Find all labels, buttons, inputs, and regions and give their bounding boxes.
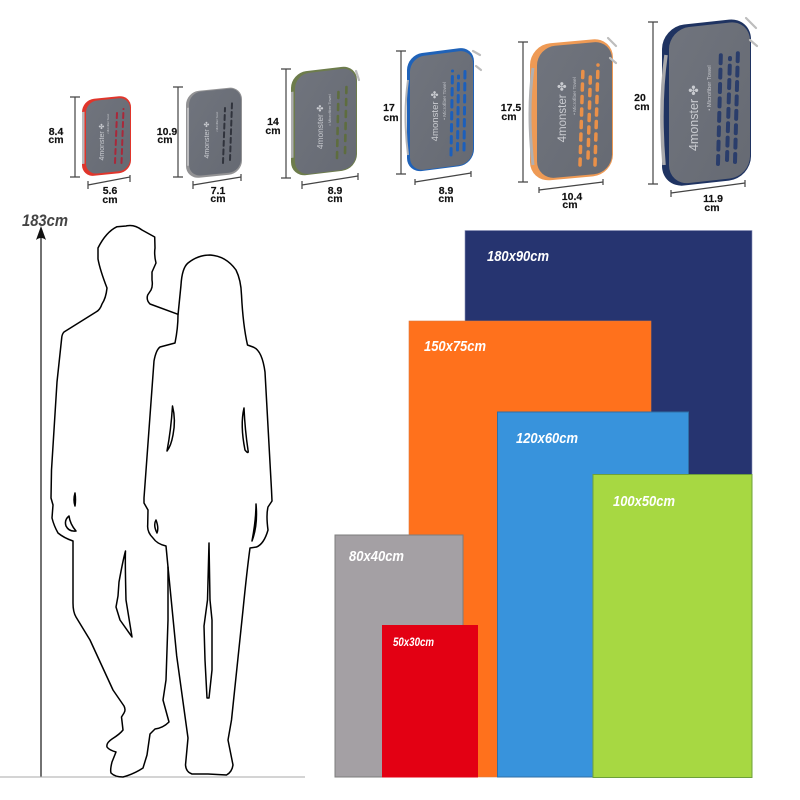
case body: grey <box>186 86 242 179</box>
case body: navy <box>662 17 751 188</box>
height label: 14 <box>267 116 279 128</box>
height label: cm <box>383 112 399 124</box>
case branding: 4monster ✤ <box>98 123 106 160</box>
case branding <box>557 77 578 142</box>
height dimension <box>281 69 291 178</box>
label: 80x40cm <box>349 549 404 565</box>
height label: cm <box>634 101 650 113</box>
width label: 11.9 <box>703 193 723 205</box>
case branding: • Microfiber Towel <box>572 77 578 115</box>
height dimension <box>70 97 80 177</box>
man inner gaps <box>65 493 132 637</box>
width label: cm <box>102 194 118 206</box>
case branding <box>430 82 448 141</box>
height dimension <box>648 22 658 184</box>
width label: 7.1 <box>211 185 225 197</box>
panel: orange case 17.5 x 10.4 cm <box>501 38 616 211</box>
case slots <box>337 85 346 158</box>
case branding: 4monster ✤ <box>557 81 569 142</box>
width label: 10.4 <box>562 191 582 203</box>
height dimension <box>518 42 528 182</box>
zipper pulls <box>473 51 481 70</box>
case slots <box>115 109 124 163</box>
case body: blue <box>407 46 474 173</box>
width label: 8.9 <box>439 185 453 197</box>
width dimension <box>539 179 603 193</box>
case branding: • Microfiber Towel <box>442 82 448 120</box>
zipper pulls <box>608 38 616 63</box>
height label: 8.4 <box>49 126 63 138</box>
case branding: • Microfiber Towel <box>106 113 110 134</box>
height label: cm <box>265 125 281 137</box>
width dimension <box>88 175 130 189</box>
strap <box>406 80 408 155</box>
silhouette: man <box>51 226 178 777</box>
width label: cm <box>704 202 720 214</box>
label: 180x90cm <box>487 249 549 265</box>
case branding: 4monster ✤ <box>315 105 325 149</box>
width dimension <box>193 174 241 189</box>
height dimension <box>396 51 406 174</box>
height label: 17 <box>383 102 395 114</box>
case branding: 4monster ✤ <box>687 84 701 151</box>
woman hand and leg gaps <box>155 504 256 698</box>
strap <box>662 55 666 165</box>
ground line <box>0 776 305 778</box>
label: 150x75cm <box>424 339 486 355</box>
width dimension <box>302 173 358 189</box>
label: 120x60cm <box>516 431 578 447</box>
width label: cm <box>438 193 454 205</box>
height dimension <box>173 87 183 177</box>
width label: cm <box>562 199 578 211</box>
strap <box>530 68 533 165</box>
label: 50x30cm <box>393 635 434 649</box>
width label: cm <box>210 193 226 205</box>
case branding <box>315 94 332 149</box>
height axis with arrow <box>36 226 46 777</box>
height label: 183cm: 183cm <box>22 211 68 230</box>
case body: orange <box>530 38 613 182</box>
case branding: • Microfiber Towel <box>327 94 332 126</box>
towel size: 150x75cm orange <box>409 321 651 777</box>
zipper pulls <box>746 18 757 46</box>
towel size: 80x40cm grey <box>335 535 463 777</box>
case branding: • Microfiber Towel <box>707 65 713 111</box>
case body: red <box>82 95 131 177</box>
panel: navy case 20 x 11.9 cm <box>634 17 757 214</box>
width label: cm <box>327 193 343 205</box>
towel size: 120x60cm blue <box>498 412 688 777</box>
panel: blue case 17 x 8.9 cm <box>383 46 481 205</box>
width label: 8.9 <box>328 185 342 197</box>
panel: grey case 10.9 x 7.1 cm <box>157 86 242 205</box>
case body: olive <box>291 65 357 177</box>
towel size: 180x90cm navy <box>465 230 752 476</box>
zipper pull <box>356 71 359 80</box>
woman arm gaps <box>167 406 248 452</box>
case slots <box>451 70 465 155</box>
height label: cm <box>157 134 173 146</box>
height label: 17.5 <box>501 102 521 114</box>
case branding: 4monster ✤ <box>430 91 441 141</box>
height label: 10.9 <box>157 126 177 138</box>
case branding: • Microfiber Towel <box>215 111 219 132</box>
case branding <box>203 111 219 158</box>
towel size: 100x50cm green <box>593 474 752 778</box>
width dimension <box>671 180 745 197</box>
width dimension <box>415 171 471 185</box>
panel: olive case 14 x 8.9 cm <box>265 65 359 205</box>
width label: 5.6 <box>103 185 117 197</box>
case branding <box>98 113 110 160</box>
height label: cm <box>501 111 517 123</box>
case slots <box>223 103 232 163</box>
case branding <box>687 65 713 151</box>
case slots <box>580 65 598 165</box>
height label: cm <box>48 134 64 146</box>
case branding: 4monster ✤ <box>203 121 211 158</box>
silhouette: woman <box>144 255 272 775</box>
panel: red case 8.4 x 5.6 cm <box>48 95 131 206</box>
height label: 20 <box>634 92 646 104</box>
label: 100x50cm <box>613 494 675 510</box>
case slots <box>718 48 738 164</box>
towel size: 50x30cm red <box>382 625 478 778</box>
